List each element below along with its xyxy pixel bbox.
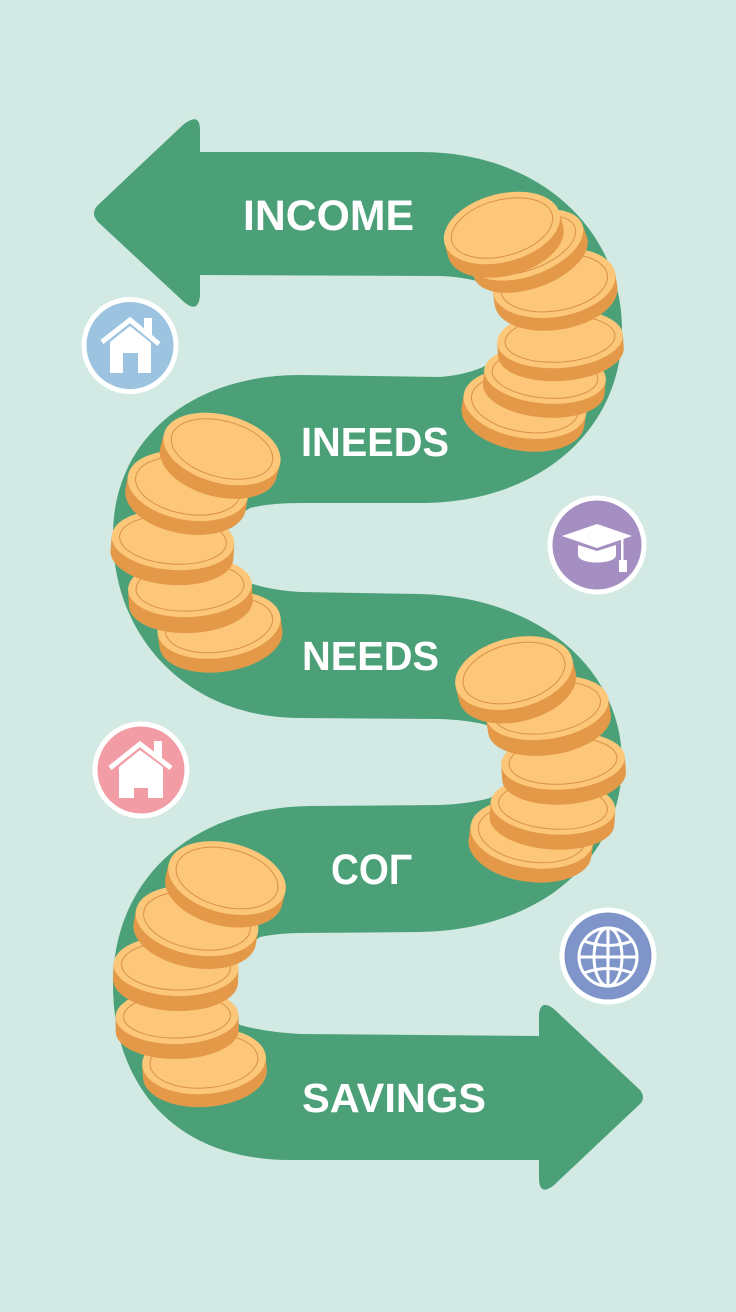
icon: graduation cap	[550, 498, 644, 592]
winding arrow ribbon	[94, 119, 643, 1190]
icon: globe	[562, 910, 654, 1002]
label: COΓ: COΓ	[331, 846, 412, 894]
label: SAVINGS: SAVINGS	[302, 1075, 486, 1121]
icon: blue house	[84, 300, 176, 392]
coin stack: lower right	[447, 625, 628, 890]
coin stack: upper left	[109, 401, 289, 680]
coin stack: upper right	[436, 180, 626, 460]
icon: pink house	[95, 724, 187, 816]
coin stack: lower left	[112, 830, 294, 1111]
label: NEEDS: NEEDS	[302, 633, 439, 679]
label: INCOME: INCOME	[243, 192, 414, 240]
label: INEEDS: INEEDS	[301, 419, 449, 465]
